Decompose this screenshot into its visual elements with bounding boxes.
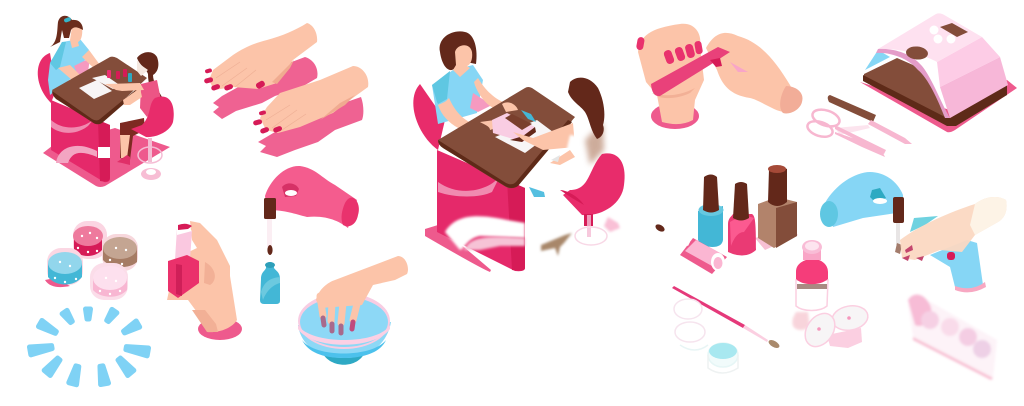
- icon: three nail polish bottles with roller: [654, 165, 798, 274]
- hands: pair of manicured hands over pink swatches: [204, 23, 368, 157]
- icon: ring of blue artificial nail tips: [29, 309, 149, 385]
- icon: bowl with hand soaking nails: [298, 256, 408, 365]
- icon: four pink, tan, blue and white glitter jars: [45, 221, 138, 300]
- hand: pink glove holding brown dropper above blue bottle: [260, 166, 359, 304]
- hand: blue gloves applying polish to client's nails: [820, 172, 1007, 292]
- icon: faded clear jars: [674, 299, 738, 373]
- icon: pink toe separator: [908, 295, 997, 380]
- icon: orange stick pink brush: [672, 286, 781, 350]
- icon: pink UV nail lamp: [860, 13, 1017, 132]
- hand: pair of hands filing nails with pink file: [636, 24, 803, 129]
- icon: scissors and cuticle file: [805, 95, 912, 157]
- scene: large manicure table with technician, UV lamp and client: [413, 31, 625, 272]
- hand: holding pink nail polish bottle: [167, 221, 242, 340]
- icon: stacked cotton pads: [799, 303, 870, 352]
- icon: polish remover bottle: [792, 240, 828, 330]
- icon: small UV lamp on table: [492, 110, 536, 142]
- scene: small manicure table with technician and client: [38, 16, 174, 187]
